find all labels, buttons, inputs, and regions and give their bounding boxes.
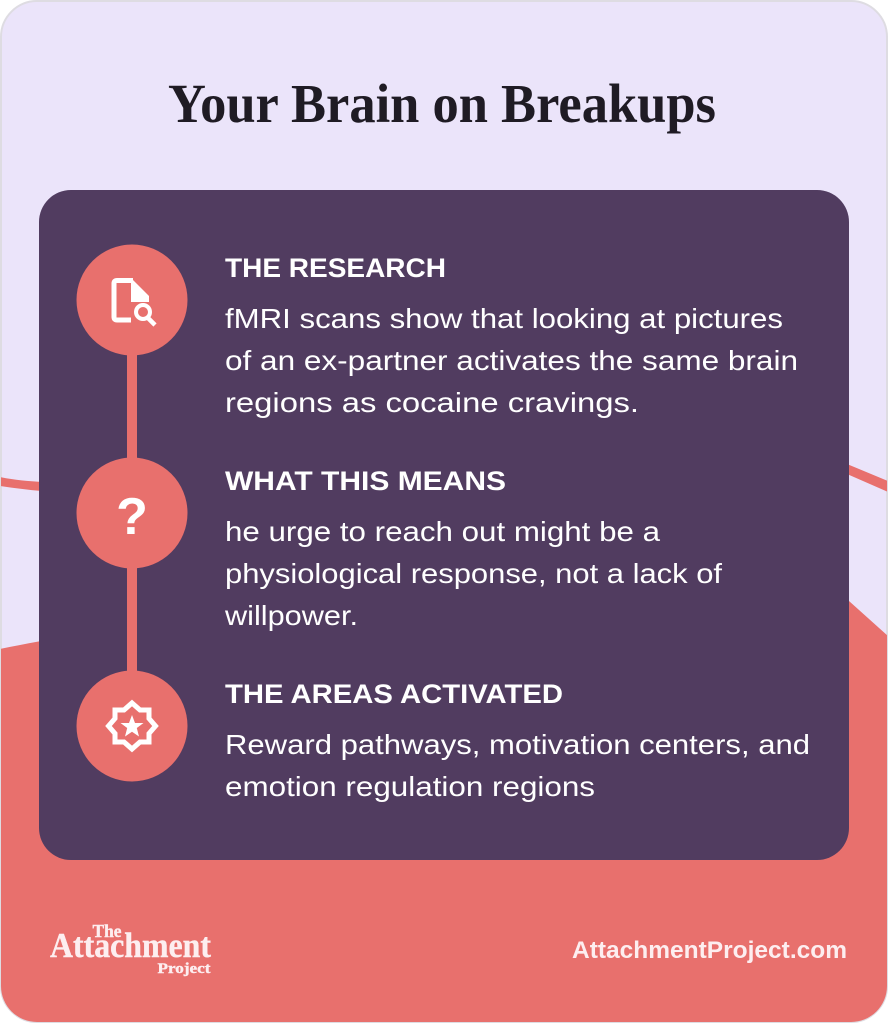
heading: what this means: WHAT THIS MEANS bbox=[225, 466, 506, 496]
step 3: the areas activated bbox=[76, 670, 810, 802]
title: Your Brain on Breakups bbox=[168, 73, 716, 134]
text: research body: fMRI scans show that looking at pictures bbox=[225, 303, 783, 334]
website url: AttachmentProject.com bbox=[572, 937, 847, 964]
text: research body bbox=[225, 303, 798, 418]
step 1: the research bbox=[76, 244, 798, 418]
text: areas body: emotion regulation regions bbox=[225, 771, 595, 802]
logo: The Attachment Project: Attachment bbox=[50, 926, 211, 965]
logo: The Attachment Project bbox=[50, 921, 211, 977]
heading: the areas activated: THE AREAS ACTIVATED bbox=[225, 679, 563, 709]
icon: star badge bbox=[76, 670, 188, 782]
heading: the research: THE RESEARCH bbox=[225, 253, 446, 283]
text: what this means body: willpower. bbox=[224, 600, 358, 631]
text: what this means body bbox=[224, 516, 722, 631]
text: research body: of an ex-partner activates the same brain bbox=[225, 345, 798, 376]
timeline connector bbox=[127, 340, 137, 690]
text: areas body bbox=[225, 729, 810, 802]
logo: The Attachment Project: Project bbox=[158, 961, 211, 977]
icon: question mark: ? bbox=[116, 488, 148, 546]
text: research body: regions as cocaine cravings. bbox=[225, 387, 639, 418]
text: what this means body: physiological response, not a lack of bbox=[225, 558, 722, 589]
step 2: what this means bbox=[76, 458, 722, 631]
text: what this means body: he urge to reach out might be a bbox=[225, 516, 660, 547]
panel: content bbox=[39, 190, 849, 860]
logo: The Attachment Project: The bbox=[92, 921, 122, 941]
icon: question mark bbox=[76, 458, 188, 568]
icon: document search bbox=[76, 244, 188, 356]
text: areas body: Reward pathways, motivation centers, and bbox=[225, 729, 810, 760]
